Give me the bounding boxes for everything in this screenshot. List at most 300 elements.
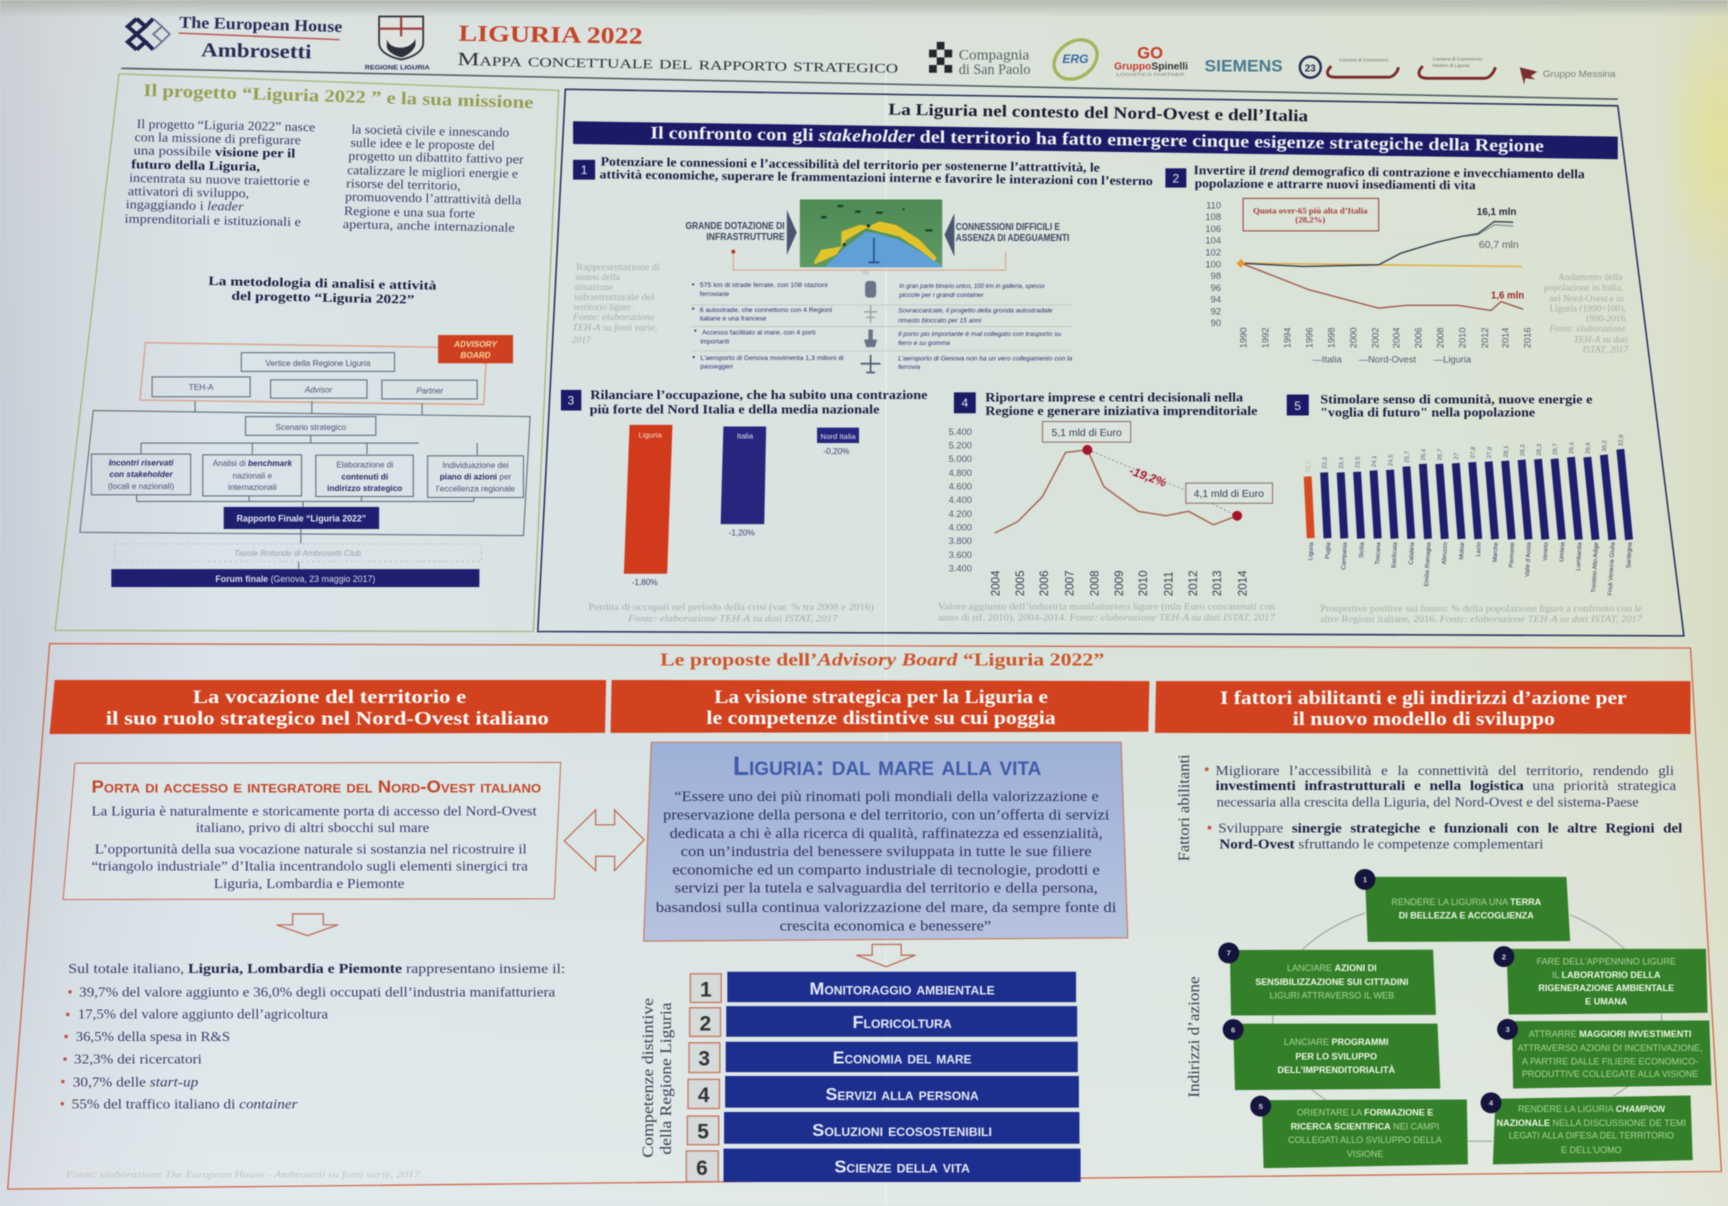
line chart: valore aggiunto: 5.400 — [949, 427, 972, 437]
line chart: valore aggiunto: 4.200 — [949, 509, 972, 519]
bar chart: occupati: -1,80% — [632, 578, 658, 587]
infrastructure table: passeggeri — [700, 364, 733, 371]
flow chart: methodology: internazionali — [228, 483, 277, 492]
bar chart: regioni: 23,3 — [1322, 456, 1329, 469]
action 2: 2 — [1502, 952, 1506, 961]
legend: —Liguria — [1434, 355, 1472, 365]
action 7: SENSIBILIZZAZIONE SUI CITTADINI — [1255, 977, 1408, 987]
bar chart: regioni: 21,7 — [1306, 460, 1312, 473]
list: competenze: 3 — [698, 1048, 710, 1071]
bar chart: regioni: Friuli Venezia Giulia — [1608, 541, 1617, 596]
line chart: population: 2000 — [1349, 327, 1359, 348]
line chart: population: 16,1 mln — [1477, 207, 1516, 218]
flow chart: methodology: Tavole Rotonde di Ambrosetti Club — [234, 549, 361, 558]
text block: fattori abilitanti: Sviluppare sinergie strategiche e funzionali con le altre Regioni del — [1218, 820, 1682, 835]
heading 3: più forte del Nord Italia e della media nazionale — [590, 402, 880, 416]
arrow wedges — [787, 210, 954, 257]
header — [128, 13, 1616, 87]
box: Liguria dal mare alla vita: basandosi sulla continua valorizzazione del mare, da sempre fonte di — [656, 900, 1116, 916]
action 7: 7 — [1227, 949, 1231, 958]
bar chart: occupati — [624, 425, 859, 587]
infrastructure table: piccole per i grandi container — [898, 292, 985, 299]
list: competenze: 2 — [699, 1012, 711, 1035]
heading: proposte: Le proposte dell’ Advisory Board “Liguria 2022” — [660, 650, 1104, 670]
bar chart: regioni: 32,9 — [1619, 434, 1625, 446]
infrastructure table: italiane e una francese — [700, 316, 767, 323]
infrastructure table: importanti — [700, 338, 730, 345]
title: LIGURIA 2022 — [458, 21, 643, 50]
line chart: population: 1994 — [1282, 327, 1292, 348]
logo: Compagnia di San Paolo — [929, 42, 1030, 78]
flow chart: methodology: Vertice della Regione Liguria — [265, 359, 371, 368]
map captions: INFRASTRUTTURE — [706, 232, 785, 243]
text block: dati Liguria Lombardia Piemonte: 30,7% delle start-up — [73, 1074, 198, 1089]
map captions: ASSENZA DI ADEGUAMENTI — [956, 233, 1070, 244]
source 3: Perdita di occupati nel periodo della crisi (var. % tra 2008 e 2016) — [588, 602, 874, 613]
header: fattori: il nuovo modello di sviluppo — [1293, 709, 1555, 730]
heading 3 — [590, 388, 928, 416]
bar chart: regioni: 23,5 — [1355, 456, 1362, 468]
bar chart: regioni: 27 — [1454, 452, 1460, 460]
box: Liguria dal mare alla vita — [644, 742, 1128, 941]
heading: metodologia: La metodologia di analisi e attività — [208, 274, 437, 293]
action 4: 4 — [1489, 1099, 1494, 1108]
header: fattori — [1155, 681, 1691, 734]
badge 2: 2 — [1173, 171, 1180, 185]
infrastructure table: L’aeroporto di Genova movimenta 1,3 milioni di — [700, 355, 844, 362]
line chart: population: 104 — [1205, 236, 1221, 246]
logo: Camere di Commercio: 23 — [1305, 64, 1316, 75]
logo: Gruppo Spinelli — [1114, 43, 1188, 77]
banner: cinque esigenze — [573, 121, 1618, 159]
action 4: LEGATI ALLA DIFESA DEL TERRITORIO — [1509, 1130, 1674, 1140]
badge 3 — [561, 390, 581, 411]
logo: Compagnia di San Paolo: Compagnia — [959, 48, 1030, 64]
bar chart: regioni: Veneto — [1543, 541, 1550, 561]
bar chart: occupati: -0,20% — [823, 447, 850, 456]
heading: contesto: La Liguria nel contesto del Nord-Ovest e dell’Italia — [888, 100, 1309, 125]
logo: Camere di Commercio: Camera di Commercio — [1433, 57, 1482, 63]
infrastructure table: ferroviarie — [700, 291, 730, 298]
callout: -19,2%: -19,2% — [1127, 464, 1169, 490]
text block: fattori abilitanti: Nord-Ovest sfruttando le competenze complementari — [1219, 837, 1544, 852]
title: Mappa concettuale del rapporto strategico — [457, 49, 898, 78]
action 2: E UMANA — [1585, 997, 1628, 1007]
arrow: double — [564, 810, 644, 871]
logo: Camere di Commercio: Camera di Commercio — [1339, 58, 1389, 64]
text block: dati Liguria Lombardia Piemonte — [61, 961, 565, 1112]
box: porta di accesso — [63, 762, 561, 900]
action 6: PER LO SVILUPPO — [1295, 1052, 1377, 1062]
line chart: population: 1,6 mln — [1491, 291, 1524, 302]
text block: mission column 2: risorse del territorio, — [346, 176, 461, 193]
bar chart: regioni: 24,5 — [1388, 454, 1395, 466]
bar chart: regioni: 26,7 — [1437, 448, 1444, 461]
line chart: population: 1990 — [1238, 327, 1248, 348]
bar chart: occupati: Liguria — [639, 431, 662, 440]
text block: mission column 2 — [343, 122, 525, 235]
badge 1: 1 — [581, 163, 588, 177]
text block: mission column 1: con la missione di prefigurare — [134, 130, 301, 147]
bar chart: regioni: Trentino Alto Adige — [1591, 541, 1600, 593]
bar chart: regioni: Puglia — [1325, 541, 1332, 559]
header: vocazione: il suo ruolo strategico nel Nord-Ovest italiano — [106, 709, 549, 730]
logo: ERG: ERG — [1062, 52, 1089, 66]
line chart: population: 106 — [1205, 224, 1221, 234]
source 1: situazione — [575, 283, 613, 293]
action 1: 1 — [1363, 875, 1368, 884]
text block: mission column 1: attivatori di sviluppo, — [128, 184, 249, 200]
callout: 4,1 mld: 4,1 mld di Euro — [1194, 489, 1264, 500]
text block: mission column 1: Il progetto “Liguria 2022” nasce — [137, 117, 316, 134]
source 2: 1990-2016. — [1585, 314, 1628, 324]
flow chart: methodology: Analisi di benchmark — [213, 459, 292, 468]
action 4: E DELL’UOMO — [1561, 1145, 1622, 1155]
list: competenze: Floricoltura — [853, 1012, 952, 1032]
heading 2: popolazione e attrarre nuovi insediamenti di vita — [1195, 176, 1476, 192]
bar chart: regioni: Molise — [1459, 541, 1466, 560]
line chart: valore aggiunto — [949, 422, 1273, 596]
bar chart: regioni: 26,4 — [1421, 448, 1427, 461]
text block: fattori abilitanti: Migliorare l’accessibilità e la connettività del territorio, rendendo gli — [1216, 763, 1674, 778]
forum finale — [111, 569, 479, 587]
line chart: valore aggiunto: 4.600 — [949, 482, 972, 492]
diagram: indirizzi d'azione — [1218, 869, 1711, 1168]
text block: dati Liguria Lombardia Piemonte: 55% del traffico italiano di container — [72, 1097, 298, 1112]
heading 4: Regione e generare iniziativa imprenditoriale — [985, 404, 1258, 418]
logo: The European House Ambrosetti: Ambrosetti — [201, 39, 312, 63]
section 4: imprese — [938, 391, 1275, 623]
source 2: Andamento della — [1558, 273, 1623, 283]
callout: 5,1 mld — [1043, 422, 1131, 442]
bar chart: regioni: 24,1 — [1372, 455, 1378, 467]
line chart: valore aggiunto: 4.000 — [949, 523, 972, 533]
line chart: valore aggiunto: 2008 — [1090, 570, 1102, 596]
badge 5 — [1287, 395, 1309, 415]
source 2: ISTAT, 2017 — [1582, 346, 1628, 356]
bar chart: regioni: 27,9 — [1487, 446, 1493, 459]
logo: Gruppo Spinelli: GO — [1137, 43, 1163, 62]
action 4: NAZIONALE NELLA DISCUSSIONE DE TEMI — [1497, 1118, 1686, 1128]
bar chart: regioni: Lazio — [1476, 541, 1483, 557]
line chart: valore aggiunto: 4.800 — [949, 468, 972, 478]
text block: fattori abilitanti — [1205, 763, 1682, 852]
bar chart: regioni: 27,8 — [1471, 446, 1477, 459]
flow chart: methodology: Partner — [416, 386, 445, 395]
action 5 — [1250, 1096, 1468, 1168]
bar chart: regioni: Sardegna — [1626, 541, 1634, 569]
panel: La Liguria nel contesto — [538, 89, 1684, 636]
infrastructure table: Accesso facilitato al mare, con 4 porti — [702, 329, 816, 336]
list: competenze — [686, 972, 1081, 1182]
bar chart: regioni: 28,7 — [1553, 443, 1559, 455]
bar chart: regioni: Piemonte — [1509, 541, 1516, 568]
flow chart: methodology: nazionali e — [233, 471, 272, 480]
bar chart: occupati: -1,20% — [729, 529, 755, 538]
line chart: population: 2016 — [1523, 327, 1533, 348]
text block: mission column 2: apertura, anche internazionale — [343, 217, 515, 235]
bar chart: regioni: 23,4 — [1339, 456, 1345, 469]
line chart: population: 110 — [1206, 200, 1221, 210]
line chart: population: 1992 — [1260, 327, 1270, 348]
header: fattori: I fattori abilitanti e gli indirizzi d’azione per — [1220, 688, 1627, 709]
flow chart: methodology: indirizzo strategico — [327, 484, 402, 493]
bar chart: regioni: Marche — [1493, 541, 1500, 562]
heading 2 — [1193, 163, 1586, 192]
line chart: valore aggiunto: 3.400 — [949, 564, 972, 574]
list: competenze: 5 — [697, 1120, 709, 1143]
section 1: infrastrutture — [572, 155, 1153, 373]
line chart: population: 2002 — [1371, 327, 1381, 348]
flow chart: methodology: (locali e nazionali) — [108, 482, 174, 491]
line chart: population: 1998 — [1327, 327, 1337, 348]
section 3: occupazione — [561, 388, 928, 625]
text block: mission column 1: incentrata su nuove traiettorie e — [129, 171, 310, 188]
header: vocazione — [50, 680, 606, 734]
source 2: TEH-A su dati — [1574, 336, 1628, 346]
bar chart: regioni: Campania — [1341, 541, 1349, 570]
source 2: Fonte: elaborazione — [1548, 325, 1626, 335]
infrastructure table: rimasto bloccato per 15 anni — [898, 318, 982, 325]
forum finale: Forum finale (Genova, 23 maggio 2017) — [215, 574, 375, 584]
logo: Camere di Commercio — [1300, 57, 1495, 78]
flow chart: methodology — [80, 335, 530, 587]
source 2: nel Nord-Ovest e in — [1549, 295, 1624, 305]
action 5: COLLEGATI ALLO SVILUPPO DELLA — [1288, 1135, 1442, 1145]
action 2 — [1493, 946, 1708, 1015]
action 3: A PARTIRE DALLE FILIERE ECONOMICO- — [1522, 1057, 1698, 1067]
label: competenze distintive — [640, 998, 675, 1158]
bar chart: regioni: Toscana — [1375, 541, 1382, 565]
heading 2: Invertire il trend demografico di contrazione e invecchiamento della — [1193, 163, 1586, 181]
logo: ERG — [1047, 32, 1105, 87]
action 6: DELL’IMPRENDITORIALITÀ — [1277, 1064, 1395, 1075]
flow chart: methodology: l’eccellenza regionale — [436, 485, 515, 494]
heading 4: Riportare imprese e centri decisionali nella — [985, 391, 1244, 405]
box: porta di accesso: La Liguria è naturalmente e storicamente porta di accesso del Nord-Ovest — [91, 804, 537, 819]
line chart: valore aggiunto: 2006 — [1039, 570, 1051, 596]
source: bottom: Fonte: elaborazione The European House - Ambrosetti su fonti varie, 2017 — [65, 1169, 420, 1180]
bar chart: regioni: 28,3 — [1520, 444, 1527, 456]
line chart: population: 2010 — [1458, 327, 1468, 348]
panel: Le proposte dell'Advisory Board — [8, 644, 1721, 1189]
line chart: population: 92 — [1211, 306, 1221, 316]
section 5: comunità — [1287, 392, 1642, 625]
logo: Regione Liguria: REGIONE LIGURIA — [365, 64, 430, 71]
action 5: VISIONE — [1347, 1149, 1383, 1159]
list: competenze: Monitoraggio ambientale — [810, 979, 995, 999]
flow chart: methodology: Advisor — [304, 385, 333, 394]
flow chart: methodology: contenuti di — [341, 472, 388, 481]
bar chart: regioni: 29,6 — [1586, 442, 1592, 454]
line chart: valore aggiunto: 2014 — [1237, 570, 1249, 596]
header: visione: le competenze distintive su cui poggia — [706, 708, 1056, 729]
source 4 — [938, 601, 1275, 623]
source 2: popolazione in Italia, — [1544, 284, 1623, 294]
logo: The European House Ambrosetti — [128, 13, 343, 63]
action 4: RENDERE LA LIGURIA CHAMPION — [1518, 1104, 1665, 1114]
icons: train road ship plane — [861, 281, 881, 373]
action 1 — [1355, 869, 1570, 942]
bar chart: regioni: 28,3 — [1537, 443, 1543, 456]
action 1: DI BELLEZZA E ACCOGLIENZA — [1399, 911, 1534, 921]
map captions — [685, 221, 1070, 244]
action 5: RICERCA SCIENTIFICA NEI CAMPI — [1291, 1121, 1439, 1132]
heading 5 — [1320, 392, 1593, 420]
line chart: valore aggiunto: 4.400 — [949, 495, 972, 505]
text block: mission column 2: sulle idee e le proposte del — [350, 136, 496, 153]
bar chart: occupati: Nord Italia — [821, 432, 856, 441]
infrastructure table: ferrovia — [898, 364, 921, 371]
line chart: valore aggiunto: 2007 — [1064, 570, 1076, 596]
infrastructure table — [691, 282, 1073, 371]
advisory board: ADVISORY — [453, 340, 498, 349]
heading 1 — [599, 155, 1153, 188]
list: competenze: 6 — [696, 1157, 708, 1180]
logo: Camere di Commercio: Riviere di Liguria — [1433, 63, 1470, 69]
box: Liguria dal mare alla vita: “Essere uno dei più rinomati poli mondiali della valorizzazione e — [674, 789, 1099, 805]
box: porta di accesso: italiano, privo di altri sbocchi sul mare — [196, 820, 429, 835]
callout: 5,1 mld: 5,1 mld di Euro — [1051, 428, 1122, 439]
text block: dati Liguria Lombardia Piemonte: 17,5% del valore aggiunto dell’agricoltura — [78, 1007, 328, 1022]
text block: mission column 1: una possibile visione per il — [133, 143, 296, 160]
bar chart: regioni: Basilicata — [1391, 541, 1399, 568]
heading 3: Rilanciare l’occupazione, che ha subito una contrazione — [590, 388, 928, 402]
line chart: population: 60,7 mln — [1479, 240, 1519, 251]
text block: fattori abilitanti: necessaria alla crescita della Liguria, del Nord-Ovest e del sistema-Paese — [1217, 794, 1639, 809]
source 4: Valore aggiunto dell’industria manifatturiera ligure (mln Euro concatenati con — [938, 601, 1275, 612]
source 1: Rappresentazione di — [576, 263, 660, 273]
bar chart: regioni — [1306, 434, 1634, 596]
heading 5: Stimolare senso di comunità, nuove energie e — [1320, 392, 1593, 406]
action 7: LANCIARE AZIONI DI — [1287, 963, 1377, 973]
source 3: Fonte: elaborazione TEH-A su dati ISTAT, 2017 — [627, 615, 838, 625]
source 3 — [588, 602, 874, 625]
line chart: valore aggiunto: 2010 — [1138, 570, 1150, 596]
action 3: PRODUTTIVE COLLEGATE ALLA VISIONE — [1522, 1069, 1698, 1079]
box: Liguria dal mare alla vita: crescita economica e benessere” — [780, 918, 991, 934]
legend: —Italia — [1313, 355, 1342, 365]
bar chart: regioni: Lombardia — [1576, 541, 1583, 571]
rapporto finale — [224, 507, 379, 529]
line chart: population: 94 — [1211, 295, 1221, 305]
source 2 — [1544, 273, 1628, 356]
map of Liguria — [800, 199, 942, 267]
box: Liguria dal mare alla vita: Liguria: dal mare alla vita — [733, 751, 1042, 781]
infrastructure table: L’aeroporto di Genova non ha un vero collegamento con la — [898, 355, 1073, 362]
label: fattori abilitanti: Fattori abilitanti — [1176, 754, 1193, 861]
box: Liguria dal mare alla vita: servizi per la tutela e salvaguardia del territorio e della persona, — [675, 881, 1098, 897]
source 1: territorio ligure. — [574, 303, 633, 313]
logo: Gruppo Messina — [1520, 67, 1616, 85]
flow chart: methodology: Elaborazione di — [336, 460, 393, 469]
action 3: 3 — [1505, 1025, 1510, 1034]
arrow: down center — [856, 944, 916, 967]
line chart: population — [1205, 198, 1533, 365]
line chart: valore aggiunto: 2004 — [991, 570, 1003, 596]
flow chart: methodology: piano di azioni per — [440, 472, 512, 481]
bar chart: regioni: Liguria — [1308, 541, 1315, 560]
source 5: Prospettive positive sul futuro: % della popolazione ligure a confronto con le — [1320, 604, 1642, 615]
logo: Gruppo Messina: Gruppo Messina — [1543, 69, 1616, 79]
action 7 — [1218, 942, 1436, 1016]
callout: 4,1 mld — [1186, 483, 1273, 503]
bar chart: regioni: Sicilia — [1359, 541, 1366, 558]
line chart: valore aggiunto: 2011 — [1164, 571, 1176, 596]
badge 4 — [954, 392, 976, 413]
badge 4: 4 — [961, 396, 968, 410]
badge 5: 5 — [1294, 399, 1301, 413]
bar chart: regioni: 28,1 — [1504, 445, 1510, 457]
banner: cinque esigenze: Il confronto con gli stakeholder del territorio ha fatto emergere cinque esigenze strategiche della Regione — [650, 122, 1544, 156]
action 3 — [1497, 1019, 1711, 1089]
source 1: Fonte: elaborazione — [572, 313, 655, 323]
callout: over-65: (28,2%) — [1295, 215, 1325, 225]
text block: mission column 1: ingaggiando i leader — [126, 197, 244, 214]
line chart: valore aggiunto: 3.600 — [949, 550, 972, 560]
line chart: population: 90 — [1211, 318, 1221, 328]
bar chart: regioni: 30,2 — [1602, 439, 1608, 452]
rapporto finale: Rapporto Finale “Liguria 2022” — [237, 513, 366, 523]
box: porta di accesso: Porta di accesso e integratore del Nord-Ovest italiano — [91, 777, 541, 796]
map captions: CONNESSIONI DIFFICILI E — [956, 222, 1060, 233]
infrastructure table: ferro e su gomma — [898, 340, 950, 347]
line chart: population: 96 — [1211, 283, 1221, 293]
line chart: population: 2008 — [1436, 327, 1446, 348]
bar chart: regioni: 25,7 — [1405, 450, 1411, 463]
action 6: 6 — [1231, 1025, 1235, 1034]
source 1: TEH-A su fonti varie, — [573, 323, 657, 334]
action 2: RIGENERAZIONE AMBIENTALE — [1538, 983, 1674, 993]
line chart: valore aggiunto: 5.200 — [949, 441, 972, 451]
line chart: valore aggiunto: 2009 — [1114, 570, 1126, 596]
action 3: ATTRAVERSO AZIONI DI INCENTIVAZIONE, — [1518, 1043, 1703, 1053]
source 1: sintesi della — [575, 273, 621, 283]
bar chart: regioni: Calabria — [1409, 541, 1416, 565]
box: porta di accesso: Liguria, Lombardia e Piemonte — [214, 876, 404, 891]
logo: Siemens: SIEMENS — [1205, 57, 1283, 76]
source 5 — [1320, 604, 1642, 625]
list: competenze: Servizi alla persona — [826, 1084, 979, 1104]
action 2: FARE DELL’APPENNINO LIGURE — [1537, 956, 1676, 966]
header: vocazione: La vocazione del territorio e — [193, 687, 466, 708]
action 5: 5 — [1259, 1102, 1264, 1111]
logo: Compagnia di San Paolo: di San Paolo — [959, 62, 1030, 78]
text block: dati Liguria Lombardia Piemonte: 32,3% dei ricercatori — [74, 1051, 202, 1066]
source 1 — [572, 263, 660, 346]
badge 1 — [573, 160, 595, 180]
box: Liguria dal mare alla vita: preservazione della persona e del territorio, con un’offerta di servizi — [663, 807, 1109, 823]
flow chart: methodology: TEH-A — [189, 383, 214, 392]
action 2: IL LABORATORIO DELLA — [1552, 970, 1661, 980]
box: Liguria dal mare alla vita: economiche ed un comparto industriale di tecnologie, prodotti e — [672, 862, 1100, 878]
heading 4 — [985, 391, 1258, 418]
header: visione — [611, 680, 1149, 733]
header: visione: La visione strategica per la Liguria e — [714, 687, 1048, 708]
box: porta di accesso: L’opportunità della sua vocazione naturale si sostanzia nel ricostruire il — [95, 842, 527, 857]
logo: The European House Ambrosetti: The European House — [179, 13, 343, 36]
box: porta di accesso: “triangolo industriale” d’Italia incentrandolo sugli elementi sinergici tra — [91, 859, 528, 874]
bar chart: regioni: Abruzzo — [1442, 541, 1449, 564]
source 1: infrastrutturale del — [574, 292, 655, 303]
heading: metodologia — [208, 274, 437, 307]
logo: Gruppo Spinelli: LOGISTICS PARTNER — [1116, 72, 1185, 77]
text block: mission column 1: imprenditoriali e istituzionali e — [124, 212, 301, 229]
label: competenze distintive: Competenze distintive — [640, 998, 657, 1158]
advisory board: BOARD — [460, 351, 491, 360]
line chart: valore aggiunto: 5.000 — [949, 454, 972, 464]
line chart: population: 2006 — [1414, 327, 1424, 348]
